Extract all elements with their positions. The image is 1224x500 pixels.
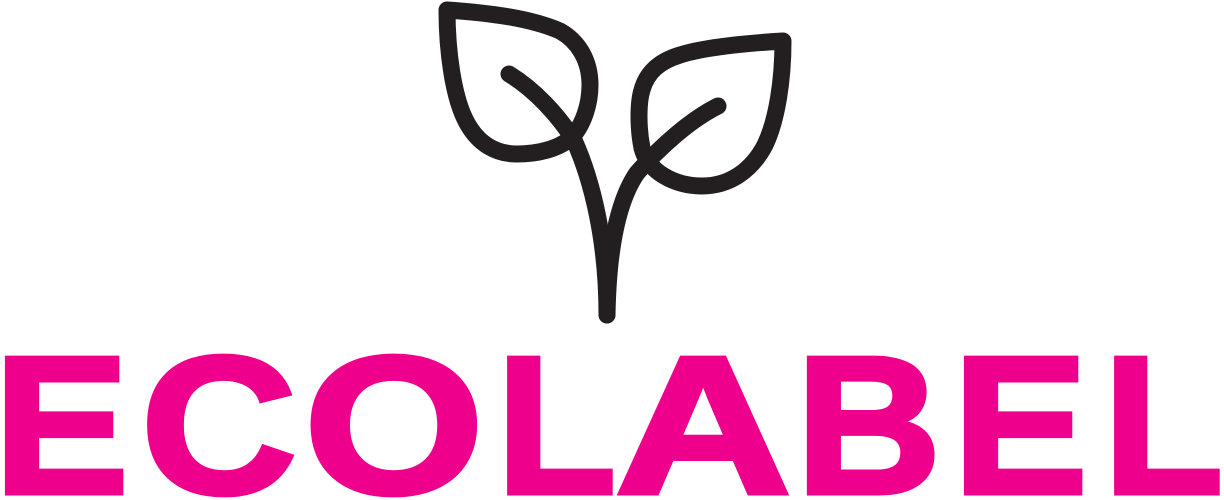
icon: sprout with two leaves <box>438 2 792 324</box>
wordmark <box>0 316 1223 500</box>
